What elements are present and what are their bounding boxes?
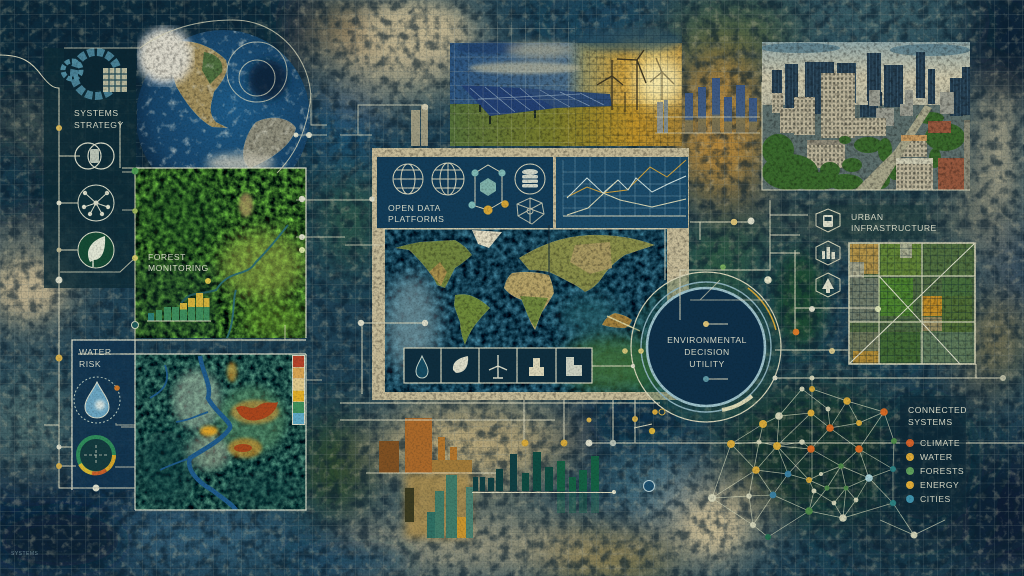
chart: skyline bars: [655, 78, 760, 133]
icon: database: [515, 164, 545, 194]
icon: hexagon data network: [468, 165, 509, 215]
label: forest monitoring: FOREST: [148, 252, 186, 262]
label: urban infrastructure: INFRASTRUCTURE: [851, 223, 937, 233]
legend item: forests: FORESTS: [920, 466, 964, 476]
panel: water risk: [72, 340, 306, 510]
legend heading: CONNECTED: [908, 405, 967, 415]
trees: [762, 112, 965, 190]
label: open data platforms: PLATFORMS: [388, 214, 444, 224]
label: systems strategy: STRATEGY: [74, 120, 124, 130]
chart: orange bars: [366, 418, 500, 538]
icon: office: [566, 357, 582, 376]
label: hub title: UTILITY: [689, 359, 725, 369]
faint footer label: SYSTEMS: [11, 551, 39, 557]
icon: buildings: [529, 358, 544, 376]
solar panels: [461, 85, 612, 124]
panel: open data platforms: [372, 148, 689, 400]
icon: leaf: [78, 232, 114, 268]
legend item: energy: ENERGY: [920, 480, 959, 490]
legend item: climate: CLIMATE: [920, 438, 960, 448]
legend item: cities: CITIES: [920, 494, 951, 504]
icon: bus: [816, 209, 840, 232]
icon: segmented data wheel: [63, 52, 127, 96]
icon: globe: [432, 163, 464, 195]
icon: leaf: [453, 356, 468, 373]
label: water risk: WATER: [79, 347, 112, 357]
icon strip: [404, 348, 592, 383]
label: systems strategy: SYSTEMS: [74, 108, 119, 118]
legend heading: SYSTEMS: [908, 417, 953, 427]
earth landmasses: [167, 41, 296, 168]
icon: wind turbine: [489, 355, 507, 378]
icon: wireframe globe: [393, 164, 423, 194]
cloud bank: [138, 28, 192, 84]
risk colour scale: [292, 355, 305, 425]
label: urban infrastructure: URBAN: [851, 212, 884, 222]
label: water risk: RISK: [79, 359, 101, 369]
wind turbines: [597, 50, 674, 112]
icon: city bars: [816, 241, 840, 265]
network graph: connected systems: [644, 376, 945, 540]
panel: forest monitoring: [135, 168, 309, 340]
label: forest monitoring: MONITORING: [148, 263, 209, 273]
continents: [395, 230, 655, 345]
legend: connected systems: [900, 396, 967, 514]
network nodes: [644, 376, 918, 540]
chart: lower teal bars: [427, 475, 473, 538]
panel: systems strategy sidebar: [44, 48, 136, 288]
label: hub title: DECISION: [684, 347, 730, 357]
panel: urban infrastructure: [816, 205, 975, 364]
circle: environmental decision utility hub: [631, 272, 781, 422]
icon: tree: [816, 273, 840, 297]
icon: drop: [416, 356, 428, 378]
label: hub title: ENVIRONMENTAL: [667, 335, 747, 345]
panel: earth globe: [137, 25, 310, 168]
world map: [385, 229, 668, 394]
chart: green bars: [472, 452, 616, 513]
icon: risk gauge: [78, 437, 114, 473]
icon: overlapping circles: [75, 143, 114, 169]
delta heat map: [135, 354, 306, 510]
line chart: [563, 157, 686, 216]
forest bar chart: [147, 293, 211, 321]
icon: water drop: [74, 377, 120, 423]
urban land-use grid: [849, 243, 975, 364]
panel: city photo: [760, 40, 976, 190]
icon: radial web: [517, 198, 544, 224]
icon: node network: [78, 185, 114, 221]
panel: renewable energy landscape: [450, 22, 686, 146]
label: open data platforms: OPEN DATA: [388, 203, 441, 213]
legend item: water: WATER: [920, 452, 953, 462]
city frame: [762, 82, 970, 190]
